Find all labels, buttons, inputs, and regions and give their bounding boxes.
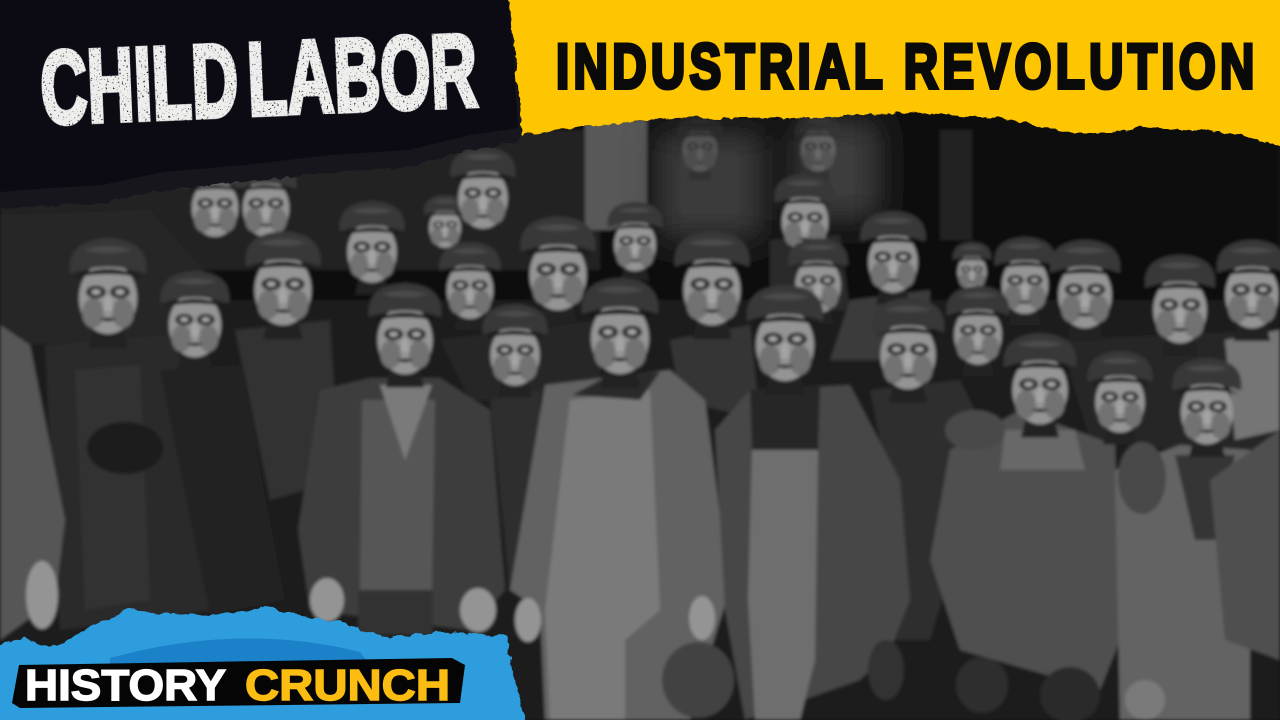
banner title: Child Labor: CHILD LABOR bbox=[38, 13, 480, 147]
banner title: Industrial Revolution: INDUSTRIAL REVOLUTION bbox=[556, 30, 1254, 102]
logo black strip bbox=[12, 658, 465, 708]
torn yellow banner bbox=[508, 0, 1280, 150]
front row: left figure coat bbox=[0, 325, 65, 640]
front row: coats bbox=[298, 370, 1280, 720]
torn blue logo panel bbox=[0, 607, 527, 720]
hands and gloves bbox=[26, 410, 1166, 720]
logo text: Crunch: CRUNCH bbox=[245, 661, 450, 710]
far back row of children bbox=[0, 114, 1056, 360]
logo text: History: HISTORY bbox=[25, 661, 226, 710]
middle row children bbox=[70, 216, 1280, 376]
front row: children faces bbox=[369, 278, 1242, 457]
middle row bodies bbox=[45, 320, 1280, 630]
torn black banner bbox=[0, 0, 522, 209]
